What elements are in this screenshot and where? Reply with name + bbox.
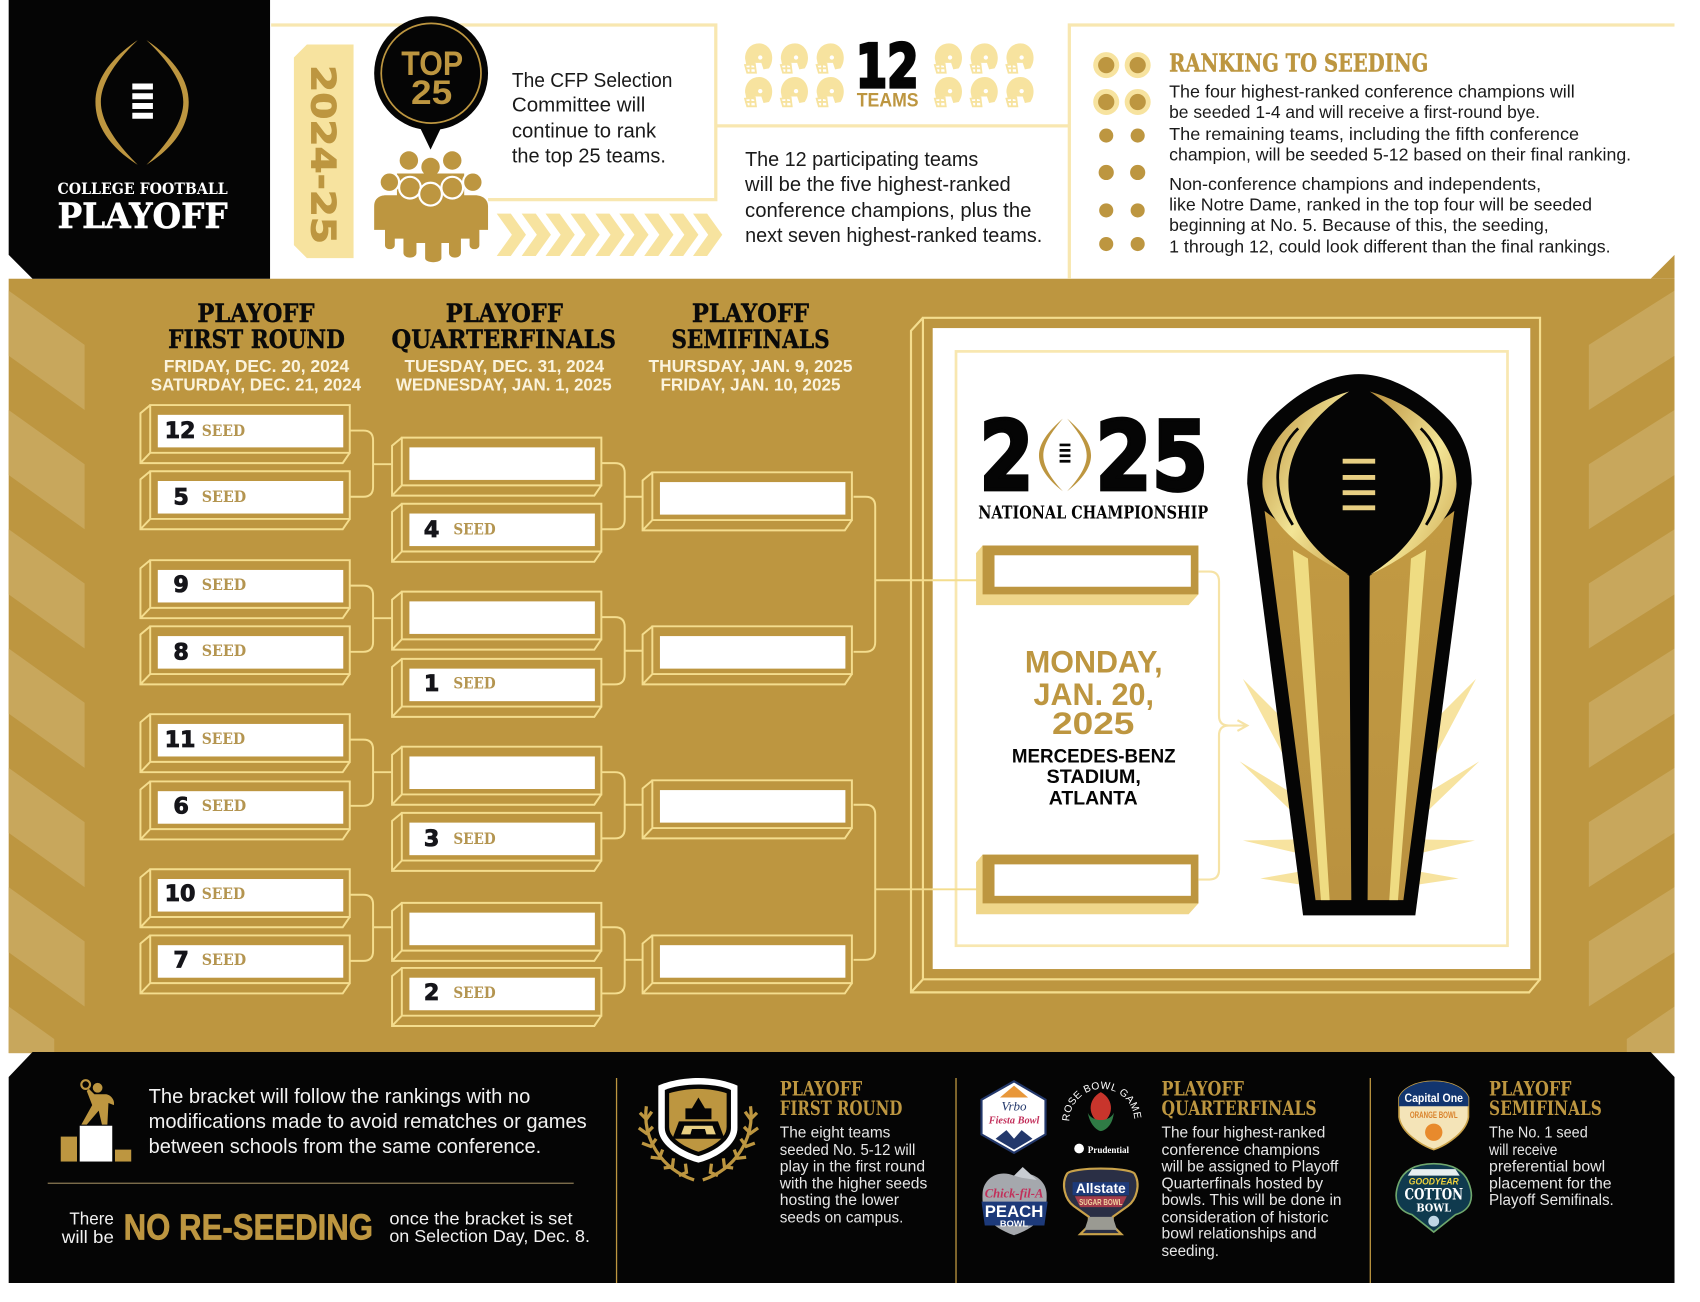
text: selection committee: Committee will xyxy=(512,95,645,117)
bracket: quarterfinals column xyxy=(392,438,601,1026)
heading: semifinals: FRIDAY, JAN. 10, 2025 xyxy=(660,374,841,394)
heading: semifinals: THURSDAY, JAN. 9, 2025 xyxy=(649,356,852,376)
text: bracket rules: modifications made to avoid rematches or games xyxy=(149,1111,587,1133)
seed 6 box: SEED xyxy=(202,796,246,815)
game date: MONDAY, xyxy=(1025,644,1163,679)
text: quarterfinals note: QUARTERFINALS xyxy=(1162,1097,1317,1120)
text: semifinals note: will receive xyxy=(1488,1142,1558,1159)
seed 11 box: SEED xyxy=(202,729,245,748)
seed 3 box: SEED xyxy=(453,829,496,848)
text: first round note: FIRST ROUND xyxy=(780,1097,902,1120)
logo wordmark: PLAYOFF xyxy=(57,196,228,237)
seed 2 box: 2 xyxy=(424,980,439,1006)
text: first round note xyxy=(779,1077,927,1226)
text: quarterfinals note: PLAYOFF xyxy=(1162,1077,1244,1100)
logo: Peach Bowl: BOWL xyxy=(1000,1220,1028,1229)
text block: The remaining teams, including the fifth conference xyxy=(1169,124,1579,144)
seed 2 box: SEED xyxy=(453,983,496,1002)
logo: Cotton Bowl xyxy=(1396,1164,1471,1232)
seed 1 box: 1 xyxy=(424,671,439,697)
text: first round note: The eight teams xyxy=(780,1125,891,1142)
game venue: MERCEDES-BENZ xyxy=(1012,745,1176,767)
2025 wordmark: 25 xyxy=(1095,401,1208,513)
heading: quarterfinals: QUARTERFINALS xyxy=(392,325,616,355)
heading: semifinals xyxy=(649,299,852,394)
callout: no re-seeding: on Selection Day, Dec. 8. xyxy=(389,1226,590,1246)
bracket: first round column xyxy=(140,405,350,993)
text: first round note: PLAYOFF xyxy=(780,1077,862,1100)
icon: trophy xyxy=(1240,374,1479,915)
text: semifinals note: placement for the xyxy=(1489,1176,1612,1193)
logo: Rose Bowl xyxy=(1062,1082,1142,1156)
icon: left helmets xyxy=(745,43,844,106)
logo: Sugar Bowl: SUGAR BOWL xyxy=(1079,1198,1123,1207)
final slot top xyxy=(976,546,1198,605)
icon: player on podium xyxy=(61,1080,131,1162)
seed 6 box: 6 xyxy=(173,793,189,819)
seed 5 box: 5 xyxy=(173,484,189,510)
logo: Peach Bowl: Chick-fil-A xyxy=(985,1185,1044,1200)
seed 12 box xyxy=(140,405,350,463)
game venue xyxy=(1012,745,1176,810)
text: first round note: with the higher seeds xyxy=(779,1176,927,1193)
seed 4 box: 4 xyxy=(424,517,439,543)
heading: quarterfinals: TUESDAY, DEC. 31, 2024 xyxy=(405,356,604,376)
seed 8 box: 8 xyxy=(173,639,189,665)
seed 11 box xyxy=(140,714,350,772)
text block xyxy=(1169,82,1631,257)
callout: no re-seeding: NO RE-SEEDING xyxy=(124,1208,373,1248)
logo wordmark xyxy=(57,179,228,237)
panel: national championship xyxy=(911,318,1540,992)
text: quarterfinals note: conference champions xyxy=(1162,1142,1320,1159)
text: selection committee xyxy=(512,70,672,168)
text block: The four highest-ranked conference champions will xyxy=(1169,82,1575,102)
text: semifinals note: SEMIFINALS xyxy=(1489,1097,1602,1120)
text: participating teams: The 12 participating teams xyxy=(745,149,978,171)
text: first round note: seeded No. 5-12 will xyxy=(780,1142,915,1159)
heading: semifinals: PLAYOFF xyxy=(692,299,809,329)
bracket connectors xyxy=(350,431,978,993)
text: quarterfinals note: Quarterfinals hosted by xyxy=(1162,1176,1323,1193)
icon: committee people group xyxy=(374,151,488,262)
text: semifinals note: The No. 1 seed xyxy=(1489,1125,1588,1142)
panel: bottom notes xyxy=(8,1052,1674,1283)
logo: Fiesta Bowl: Vrbo xyxy=(1002,1099,1027,1114)
season tab 2024-25: 2024-25 xyxy=(303,65,342,244)
logo: Rose Bowl: Prudential xyxy=(1088,1145,1129,1156)
icon: right helmets xyxy=(935,43,1034,106)
heading: semifinals: SEMIFINALS xyxy=(671,325,830,355)
seed 5 box xyxy=(140,471,350,529)
text: first round note: play in the first round xyxy=(780,1158,925,1175)
2025 wordmark xyxy=(978,401,1208,523)
heading: RANKING TO SEEDING xyxy=(1169,50,1428,78)
seed 5 box: SEED xyxy=(202,487,246,506)
seed 12 box: 12 xyxy=(165,418,195,444)
text: bracket rules: The bracket will follow the rankings with no xyxy=(149,1086,530,1108)
text: first round note: seeds on campus. xyxy=(780,1209,903,1226)
text block: be seeded 1-4 and will receive a first-round bye. xyxy=(1169,102,1540,122)
seed 11 box: 11 xyxy=(165,727,195,753)
text block: champion, will be seeded 5-12 based on their final ranking. xyxy=(1169,145,1631,165)
seed 10 box: 10 xyxy=(165,881,195,907)
12 teams stat xyxy=(856,33,919,111)
seed 9 box: 9 xyxy=(173,572,189,598)
logo: Orange Bowl xyxy=(1399,1081,1468,1150)
seed 8 box xyxy=(140,626,350,684)
text: selection committee: continue to rank xyxy=(512,121,657,143)
seed 7 box xyxy=(140,935,350,993)
seed 3 box: 3 xyxy=(424,826,439,852)
heading: first round: SATURDAY, DEC. 21, 2024 xyxy=(151,374,361,394)
seed 6 box xyxy=(140,781,350,839)
seed 8 box: SEED xyxy=(202,641,246,660)
icon: campus shield with laurels xyxy=(639,1078,758,1180)
seed 4 box xyxy=(392,504,601,562)
logo wordmark: COLLEGE FOOTBALL xyxy=(57,179,228,198)
bracket: semifinals column xyxy=(643,472,852,993)
seed 1 box: SEED xyxy=(453,674,496,693)
text: quarterfinals note: seeding. xyxy=(1162,1243,1219,1260)
text: quarterfinals note: consideration of historic xyxy=(1162,1209,1329,1226)
seed 7 box: SEED xyxy=(202,950,246,969)
12 teams stat: 12 xyxy=(856,33,919,102)
logo: Sugar Bowl xyxy=(1064,1169,1138,1234)
game date: 2025 xyxy=(1052,706,1134,741)
logo: Cotton Bowl: GOODYEAR xyxy=(1409,1176,1459,1186)
heading: quarterfinals: WEDNESDAY, JAN. 1, 2025 xyxy=(396,374,612,394)
text: selection committee: the top 25 teams. xyxy=(512,146,666,168)
seed 3 box xyxy=(392,813,601,871)
heading: first round: FIRST ROUND xyxy=(168,325,345,355)
text block: like Notre Dame, ranked in the top four will be seeded xyxy=(1169,194,1592,214)
arrow: to trophy xyxy=(1198,572,1247,880)
logo: Orange Bowl: Capital One xyxy=(1404,1091,1463,1105)
heading: quarterfinals xyxy=(392,299,616,394)
text: first round note: hosting the lower xyxy=(780,1192,899,1209)
logo panel: College Football Playoff xyxy=(9,0,270,279)
text: participating teams: will be the five highest-ranked xyxy=(744,174,1011,196)
seed 10 box: SEED xyxy=(202,884,245,903)
logo: Orange Bowl: ORANGE BOWL xyxy=(1410,1110,1458,1120)
logo: Peach Bowl: PEACH xyxy=(985,1203,1043,1221)
text: bracket rules xyxy=(149,1086,587,1158)
panel: ranking to seeding xyxy=(1169,50,1631,257)
logo: Sugar Bowl: Allstate xyxy=(1076,1180,1126,1196)
icon: top 25 speech bubble: TOP xyxy=(401,45,463,83)
trophy rays xyxy=(1240,679,1479,885)
text: participating teams: conference champions, plus the xyxy=(745,200,1031,222)
heading: first round xyxy=(151,299,361,394)
icon: football logo xyxy=(95,40,189,165)
12 teams stat: TEAMS xyxy=(857,89,919,111)
top frame lines xyxy=(271,25,1675,279)
text: quarterfinals note xyxy=(1161,1077,1342,1260)
2025 wordmark: 2 xyxy=(979,401,1034,513)
text block: beginning at No. 5. Because of this, the seeding, xyxy=(1169,215,1549,235)
logo: Rose Bowl: ROSE BOWL GAME xyxy=(1062,1082,1142,1121)
seed 7 box: 7 xyxy=(173,947,189,973)
icon: ranking dots xyxy=(1093,52,1151,251)
heading: first round: FRIDAY, DEC. 20, 2024 xyxy=(164,356,349,376)
text: participating teams xyxy=(744,149,1042,247)
logo: Fiesta Bowl: Fiesta Bowl xyxy=(988,1116,1039,1127)
text: quarterfinals note: The four highest-ranked xyxy=(1162,1125,1325,1142)
arrow: chevron band xyxy=(497,214,722,256)
logo: Fiesta Bowl xyxy=(981,1081,1045,1153)
callout: no re-seeding: once the bracket is set xyxy=(389,1208,573,1228)
seed 9 box xyxy=(140,560,350,618)
connector lines through panel xyxy=(933,580,978,889)
text: semifinals note: preferential bowl xyxy=(1489,1158,1605,1175)
text: semifinals note xyxy=(1488,1077,1614,1209)
gold bracket field xyxy=(9,279,1675,1053)
2025 wordmark: NATIONAL CHAMPIONSHIP xyxy=(978,502,1208,523)
game date xyxy=(1025,644,1163,741)
text: bracket rules: between schools from the same conference. xyxy=(149,1136,541,1158)
logo: Cotton Bowl: BOWL xyxy=(1416,1201,1451,1214)
text: selection committee: The CFP Selection xyxy=(512,70,672,92)
heading: first round: PLAYOFF xyxy=(197,299,315,329)
season tab 2024-25 xyxy=(294,44,354,258)
text: quarterfinals note: bowl relationships and xyxy=(1162,1226,1317,1243)
text: quarterfinals note: will be assigned to Playoff xyxy=(1161,1158,1339,1175)
icon: top 25 speech bubble xyxy=(374,16,488,150)
text block: Non-conference champions and independents, xyxy=(1169,174,1541,194)
callout: no re-seeding: There xyxy=(69,1208,114,1228)
icon: top 25 speech bubble: 25 xyxy=(411,74,452,112)
text: quarterfinals note: bowls. This will be done in xyxy=(1162,1192,1342,1209)
seed 4 box: SEED xyxy=(453,520,496,539)
seed 2 box xyxy=(392,968,601,1026)
game date: JAN. 20, xyxy=(1034,677,1154,712)
seed 1 box xyxy=(392,659,601,717)
seed 10 box xyxy=(140,869,350,927)
logo: Cotton Bowl: COTTON xyxy=(1404,1185,1463,1204)
game venue: STADIUM, xyxy=(1047,766,1141,788)
seed 12 box: SEED xyxy=(202,421,245,440)
text: semifinals note: Playoff Semifinals. xyxy=(1489,1192,1614,1209)
text: semifinals note: PLAYOFF xyxy=(1489,1077,1572,1100)
logo: Peach Bowl xyxy=(981,1167,1048,1235)
game venue: ATLANTA xyxy=(1049,788,1138,810)
heading: quarterfinals: PLAYOFF xyxy=(446,299,563,329)
corner accent top right xyxy=(1651,255,1675,279)
callout: no re-seeding xyxy=(61,1208,590,1248)
text block: 1 through 12, could look different than the final rankings. xyxy=(1169,237,1611,257)
final slot bottom xyxy=(976,855,1198,914)
seed 9 box: SEED xyxy=(202,575,246,594)
icon: small football xyxy=(1039,419,1091,491)
callout: no re-seeding: will be xyxy=(61,1227,114,1247)
text: participating teams: next seven highest-ranked teams. xyxy=(745,225,1042,247)
